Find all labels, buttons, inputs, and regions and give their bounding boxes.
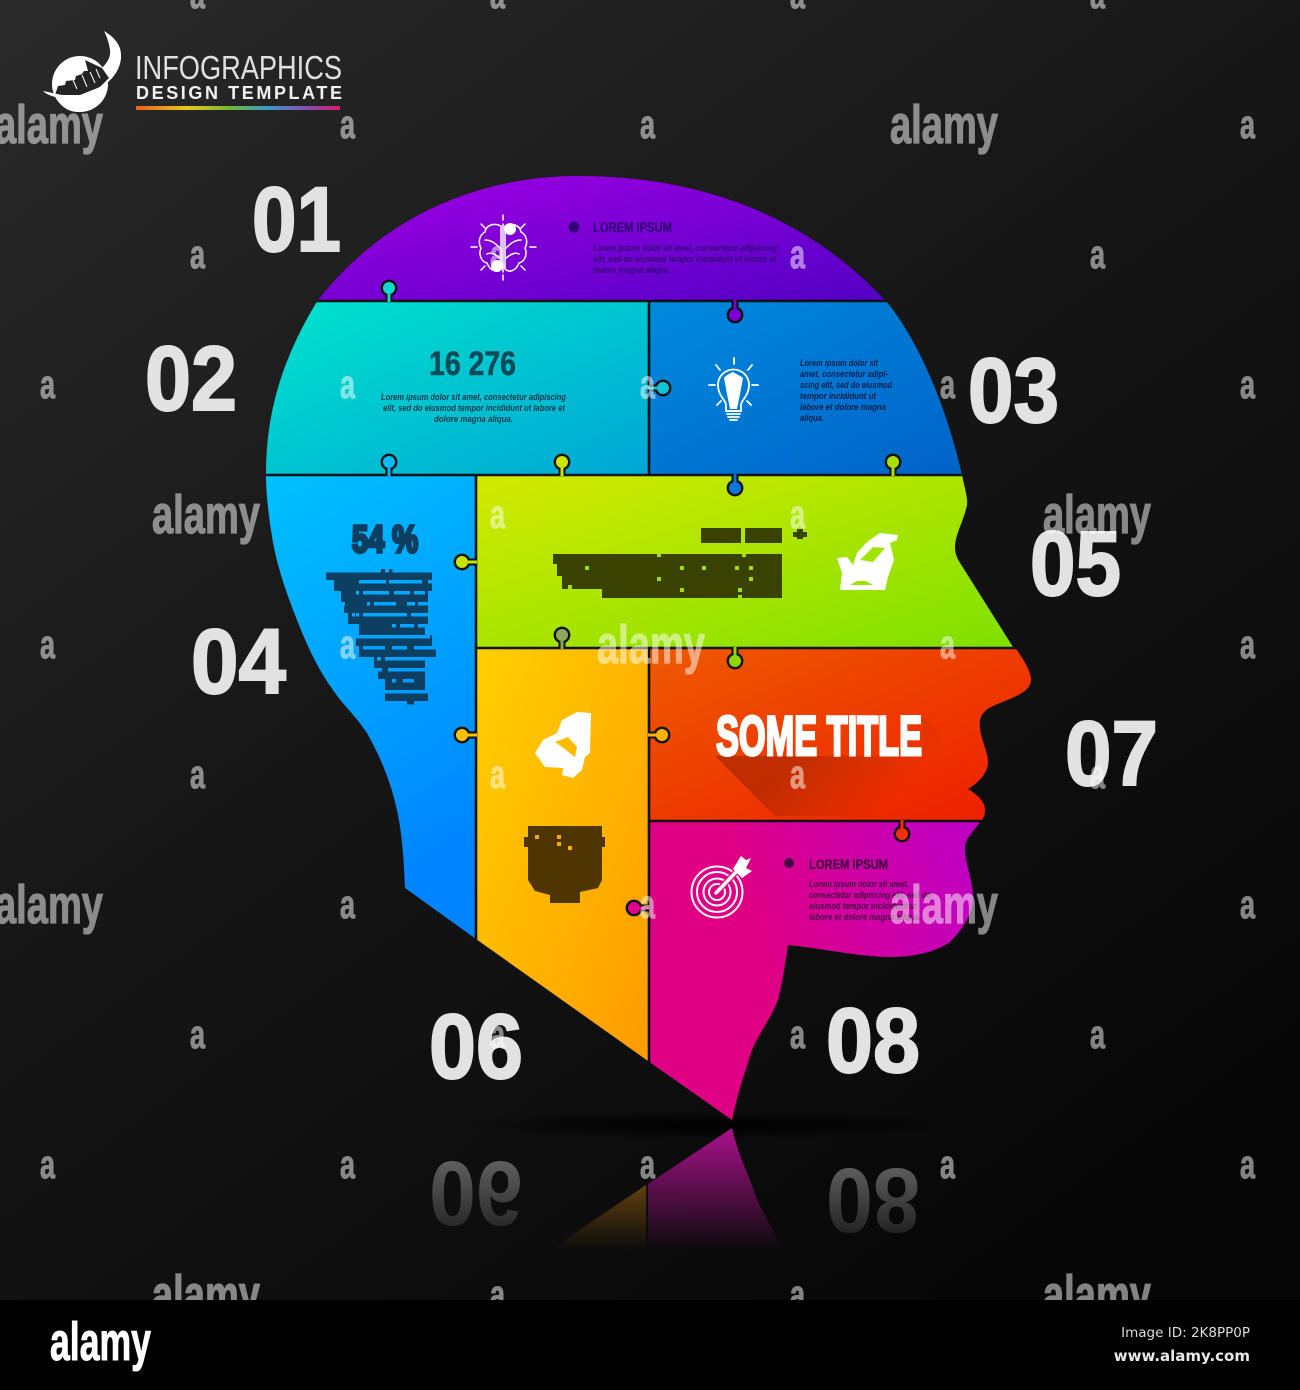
connector cyan	[381, 454, 397, 476]
watermark overlay: alamy	[1043, 485, 1151, 545]
panel 2: figure	[381, 345, 566, 424]
watermark overlay: a	[1240, 1143, 1256, 1187]
body text	[381, 392, 566, 424]
watermark overlay: alamy	[152, 485, 260, 545]
number 06: 06	[429, 996, 523, 1098]
panel 5 fill	[476, 475, 1021, 648]
watermark overlay: a	[790, 493, 806, 537]
pixelated large figure	[553, 554, 782, 598]
panel 4: percentage	[326, 519, 436, 704]
watermark overlay: a	[790, 233, 806, 277]
logo subtitle: DESIGN TEMPLATE	[136, 83, 342, 103]
watermark overlay: a	[340, 623, 356, 667]
watermark overlay: a	[790, 1273, 806, 1317]
connector orange left	[454, 727, 477, 743]
watermark overlay: a	[790, 753, 806, 797]
watermark overlay: a	[190, 233, 206, 277]
image id: Image ID: 2K8PP0P	[1121, 1325, 1250, 1341]
footer bar	[0, 1300, 1300, 1390]
body text: dolore magna aliqua.	[434, 414, 513, 424]
body text: elit, sed do eiusmod tempor incididunt ut labore et	[593, 254, 777, 264]
watermark overlay: a	[1240, 883, 1256, 927]
heading: LOREM IPSUM	[593, 219, 672, 235]
reflection: magenta panel	[648, 1128, 800, 1300]
watermark overlay: alamy	[1043, 1265, 1151, 1325]
connector teal top	[381, 280, 397, 302]
logo	[43, 31, 342, 112]
connector muted green	[554, 627, 570, 649]
watermark overlay: a	[1240, 363, 1256, 407]
body text	[593, 243, 777, 275]
panel 5: headline block	[553, 528, 898, 598]
watermark overlay: a	[640, 883, 656, 927]
icon: pixelated leaf	[837, 533, 898, 590]
connector orange right	[648, 727, 670, 743]
watermark overlay: alamy	[152, 1265, 260, 1325]
bullet dot	[568, 222, 580, 232]
reflected number 08: 08	[826, 1149, 920, 1251]
icon: pixelated cup	[524, 826, 605, 903]
watermark overlay: a	[190, 753, 206, 797]
watermark overlay: a	[1240, 623, 1256, 667]
watermark overlay: alamy	[890, 875, 998, 935]
body text: dolore magna aliqua.	[593, 265, 670, 275]
watermark overlay: a	[340, 103, 356, 147]
watermark overlay: a	[490, 233, 506, 277]
logo title: INFOGRAPHICS	[135, 49, 342, 86]
pixelated small heading	[701, 528, 807, 543]
connector teal right	[648, 380, 671, 396]
panel 3: idea	[709, 358, 892, 423]
body text	[809, 879, 931, 922]
connector purple	[727, 300, 743, 323]
watermark overlay: a	[1090, 753, 1106, 797]
panel 7 fill	[649, 648, 1039, 821]
watermark overlay: a	[40, 1143, 56, 1187]
watermark overlay: a	[640, 1143, 656, 1187]
panel 6: rocket and cup	[524, 712, 605, 903]
reflected number 06: 06	[429, 1142, 523, 1244]
watermark overlay: a	[40, 623, 56, 667]
body text: labore et dolore magna	[800, 402, 886, 412]
reflection: orange panel	[476, 1185, 646, 1300]
step numbers	[145, 169, 1158, 1098]
watermark overlay: a	[1090, 233, 1106, 277]
icon: target with arrow	[692, 856, 752, 918]
connector green left	[454, 554, 477, 570]
icon: light bulb	[709, 358, 758, 420]
bullet dot	[784, 858, 794, 868]
watermark overlay: alamy	[890, 95, 998, 155]
watermark overlay: a	[40, 363, 56, 407]
watermark overlay: a	[940, 623, 956, 667]
panel 3 fill	[649, 301, 969, 475]
watermark overlay: a	[490, 753, 506, 797]
panel 1: brain	[471, 215, 777, 280]
panel 4 fill	[260, 475, 476, 945]
watermark overlay: a	[340, 883, 356, 927]
site address: www.alamy.com	[1114, 1347, 1250, 1365]
puzzle connectors	[381, 280, 910, 916]
icon: pixelated rocket	[535, 712, 591, 778]
body text: Lorem ipsum dolor sit amet, consectetur adipiscing	[593, 243, 777, 253]
body text: Lorem ipsum dolor sit	[800, 358, 879, 368]
rainbow underline	[136, 106, 340, 110]
connector magenta	[626, 900, 649, 916]
number 08: 08	[826, 990, 920, 1092]
body text	[800, 358, 892, 423]
number 05: 05	[1030, 513, 1121, 615]
long shadow of title	[715, 718, 934, 816]
icon: brain	[471, 215, 536, 280]
watermark overlay: a	[940, 1143, 956, 1187]
number 04: 04	[191, 611, 286, 713]
panel 8 fill	[649, 821, 979, 1121]
watermark overlay: a	[190, 1013, 206, 1057]
connector green down	[727, 647, 743, 669]
footer logo: alamy	[50, 1312, 151, 1372]
watermark overlay: a	[340, 1143, 356, 1187]
watermark overlay: a	[640, 363, 656, 407]
panel 7: some title: SOME TITLE	[716, 704, 922, 767]
big number: 16 276	[429, 345, 516, 383]
body text: amet, consectetur adipi-	[800, 369, 888, 379]
number 03: 03	[968, 340, 1059, 442]
ground shadow	[460, 1110, 960, 1140]
connector blue	[727, 474, 743, 496]
connector yellow green	[554, 454, 570, 476]
pixelated text block	[326, 569, 436, 704]
body text: tempor incididunt ut	[800, 391, 877, 401]
watermark overlay: a	[490, 493, 506, 537]
connector red	[894, 820, 910, 842]
body text: labore et dolore magna aliqua.	[809, 912, 921, 922]
body text: eiusmod tempor incididunt ut	[809, 901, 918, 911]
body text: scing elit, sed do eiusmod	[800, 380, 892, 390]
body text: Lorem ipsum dolor sit amet,	[809, 879, 909, 889]
panel 8: target	[692, 856, 931, 922]
watermark overlay: a	[1240, 103, 1256, 147]
body text: Lorem ipsum dolor sit amet, consectetur adipiscing	[381, 392, 566, 402]
head silhouette	[260, 170, 1039, 1121]
watermark overlay: alamy	[597, 615, 705, 675]
watermark overlay: a	[940, 363, 956, 407]
connector lime	[885, 454, 901, 476]
body text: aliqua.	[800, 413, 824, 423]
watermark overlay: a	[790, 1013, 806, 1057]
watermark overlay: a	[1090, 1013, 1106, 1057]
watermark overlay: a	[640, 103, 656, 147]
heading: LOREM IPSUM	[809, 856, 888, 872]
number 07: 07	[1065, 703, 1158, 805]
panel 1 fill	[300, 170, 900, 301]
number 02: 02	[145, 328, 237, 430]
panel 2 fill	[260, 301, 649, 475]
watermark overlay: a	[340, 363, 356, 407]
body text: consectetur adipiscing elit, sed do	[809, 890, 931, 900]
body text: elit, sed do eiusmod tempor incididunt ut labore et	[383, 403, 566, 413]
percentage value: 54 %	[352, 519, 418, 561]
watermark overlay: a	[490, 1013, 506, 1057]
panel 6 fill	[476, 648, 649, 1068]
icon: logo globe and crescent	[43, 31, 121, 112]
head reflection	[476, 1128, 800, 1300]
watermark overlay: a	[490, 1273, 506, 1317]
number 01: 01	[252, 169, 341, 271]
